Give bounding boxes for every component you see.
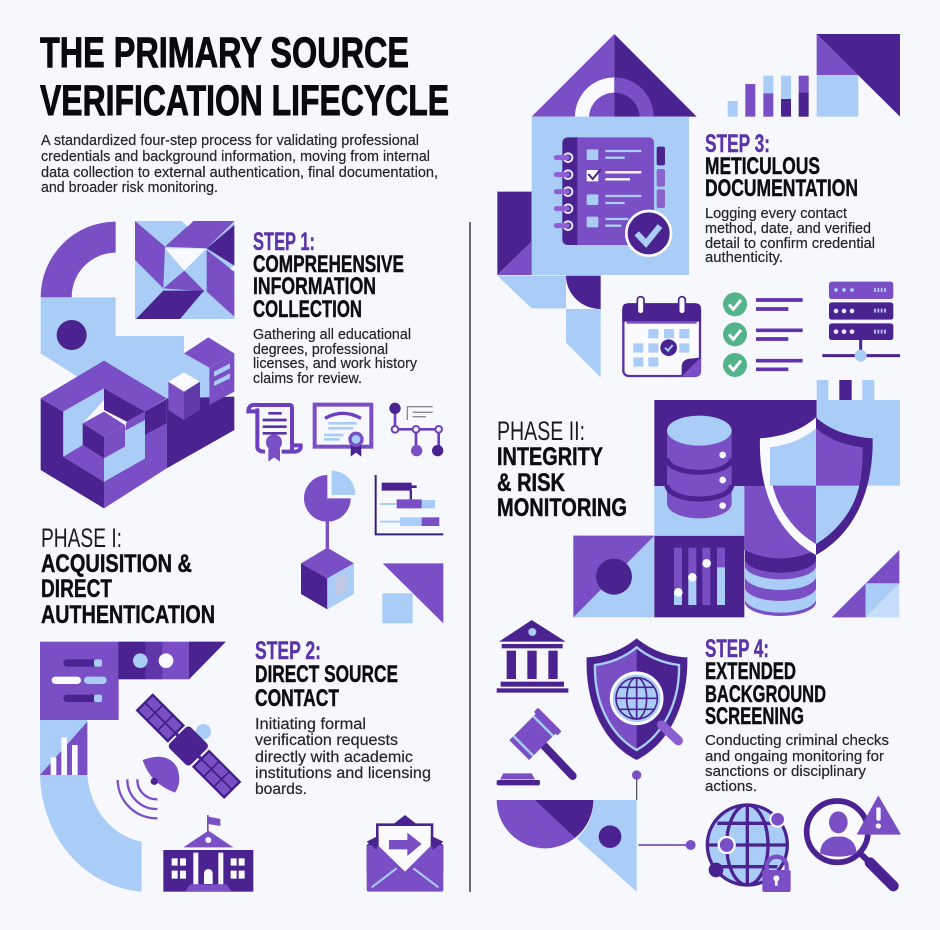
step 4 heading and text: Conducting criminal checks [705, 733, 889, 749]
icon: university building [163, 815, 253, 892]
step 1 heading and text: degrees, professional [253, 342, 388, 358]
panel: step 2 illustration [40, 642, 443, 892]
icon: satellite [118, 692, 243, 818]
top tabs [817, 380, 874, 400]
icon: shield [760, 417, 873, 555]
icon: gavel [497, 708, 573, 785]
step 3 heading and text: authenticity. [705, 250, 783, 266]
intro text: and broader risk monitoring. [41, 180, 218, 196]
light square [532, 117, 689, 275]
phase 2 heading: PHASE II: [497, 416, 585, 446]
pinwheel tile [135, 221, 234, 319]
light background block [41, 297, 209, 433]
triangle tile right [832, 550, 899, 617]
connector line [638, 840, 696, 850]
icon: diploma scroll [248, 405, 301, 462]
sliders tile [40, 642, 119, 720]
step 3 heading and text: method, date, and verified [705, 221, 871, 237]
icon: server stack [822, 282, 900, 362]
step 2 heading and text: Initiating formal [255, 716, 366, 733]
left geometric pieces [497, 192, 601, 377]
top right geometric and bar chart [728, 34, 900, 117]
arc shape [41, 222, 116, 297]
phase 2 heading [497, 416, 627, 522]
step 4 heading and text: EXTENDED [705, 658, 796, 685]
roof with half rings [532, 34, 697, 117]
step 2 heading and text: institutions and licensing [255, 765, 431, 782]
icon: magnifier with person and warning [807, 797, 900, 886]
database cylinder [667, 416, 732, 518]
step 4 heading and text [705, 635, 889, 795]
phase 1 heading: PHASE I: [41, 523, 122, 553]
title: VERIFICATION LIFECYCLE [40, 77, 449, 125]
dark circle [57, 320, 87, 350]
step 4 heading and text: actions. [705, 779, 757, 795]
intro text: A standardized four-step process for validating professional [41, 133, 419, 149]
top strip with circles [118, 642, 226, 679]
step 2 heading and text: STEP 2: [255, 637, 321, 665]
step 3 heading and text: METICULOUS [705, 153, 820, 180]
intro text: data collection to external authentication, final documentation, [41, 165, 438, 181]
small server box [184, 337, 234, 405]
step 2 heading and text [255, 637, 431, 798]
half circle and triangle [497, 800, 637, 892]
icon: notebook checklist [556, 137, 671, 256]
phase 2 heading: & RISK [497, 469, 565, 497]
step 2 heading and text: CONTACT [255, 685, 339, 712]
light column and bars [40, 720, 87, 775]
icon: calendar [622, 297, 701, 377]
phase 2 heading: INTEGRITY [497, 443, 603, 471]
background tiles [654, 400, 900, 535]
phase 1 heading: ACQUISITION & [41, 550, 192, 578]
step 1 heading and text: INFORMATION [253, 273, 376, 300]
icon: green check list [723, 292, 803, 377]
step 3 heading and text: Logging every contact [705, 206, 847, 222]
chart: gantt [376, 475, 443, 534]
icon: shield with globe magnifier [587, 638, 687, 760]
step 3 heading and text: DOCUMENTATION [705, 175, 858, 202]
icon: network tree [389, 403, 443, 456]
isometric block [41, 361, 234, 508]
step 1 heading and text: claims for review. [253, 371, 362, 387]
step 4 heading and text: BACKGROUND [705, 681, 826, 708]
small white-top cube [168, 372, 200, 420]
intro text: credentials and background information, moving from internal [41, 149, 430, 165]
panel: step 1 geometric illustration [41, 221, 443, 623]
phase 1 heading [41, 523, 215, 629]
connector pin [632, 770, 641, 800]
step 2 heading and text: verification requests [255, 732, 398, 749]
step 3 heading and text: STEP 3: [705, 130, 770, 158]
title [40, 29, 449, 125]
step 1 heading and text [253, 228, 418, 387]
step 2 heading and text: boards. [255, 781, 307, 798]
step 1 heading and text: Gathering all educational [253, 327, 411, 343]
step 3 heading and text: detail to confirm credential [705, 236, 875, 252]
title: THE PRIMARY SOURCE [40, 29, 409, 77]
step 4 heading and text: STEP 4: [705, 635, 769, 663]
phase 2 heading: MONITORING [497, 494, 627, 522]
step 1 heading and text: COMPREHENSIVE [253, 251, 404, 278]
step 4 heading and text: sanctions or disciplinary [705, 764, 867, 780]
light curved shape [40, 775, 142, 892]
intro text [41, 133, 438, 196]
step 4 heading and text: and ongaing monitoring for [705, 749, 884, 765]
triangle tile with circle [573, 536, 654, 617]
step 3 heading and text [705, 130, 875, 266]
phase 1 heading: DIRECT [41, 575, 112, 603]
icon: envelope with arrow [367, 815, 443, 892]
icon: certificate [313, 403, 373, 457]
step 2 heading and text: directly with academic [255, 749, 413, 766]
icon: globe with lock [707, 805, 791, 892]
panel: step 4 illustrations [497, 620, 900, 892]
step 4 heading and text: SCREENING [705, 703, 804, 730]
step 1 heading and text: licenses, and work history [253, 356, 418, 372]
icon: bank building [497, 620, 568, 693]
chart: level bars tile [654, 536, 744, 617]
panel: step 3 illustration [497, 34, 900, 377]
icon: pie chart and cube [301, 471, 355, 609]
step 1 heading and text: STEP 1: [253, 228, 315, 256]
phase 1 heading: AUTHENTICATION [41, 601, 215, 629]
stacked coins [744, 486, 817, 616]
step 1 heading and text: COLLECTION [253, 296, 362, 323]
step 2 heading and text: DIRECT SOURCE [255, 661, 398, 688]
panel: phase 2 illustration [573, 380, 900, 617]
decorative triangle and square [382, 563, 443, 623]
